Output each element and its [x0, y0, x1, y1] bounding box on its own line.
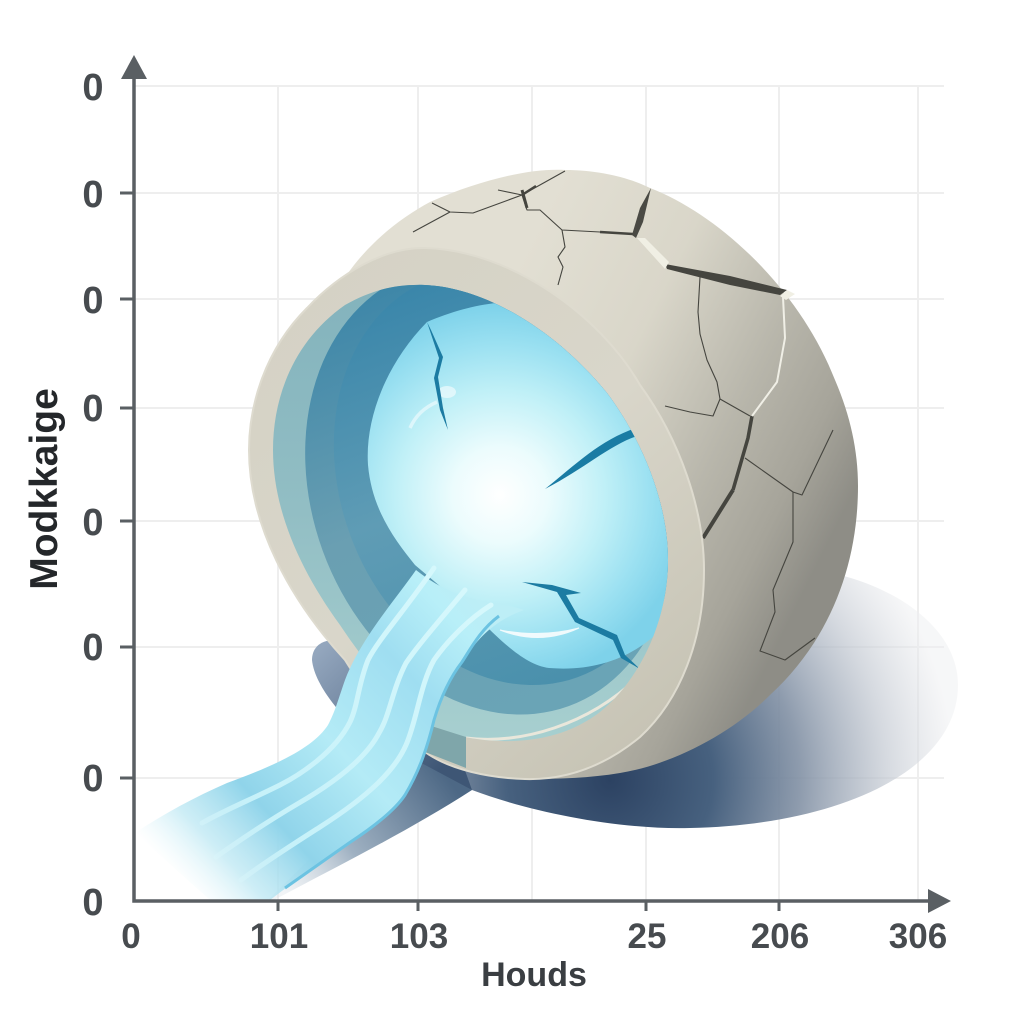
x axis labels: 206	[751, 917, 809, 956]
y axis labels: 0	[82, 388, 104, 430]
stream right edge	[285, 616, 499, 888]
thick cracks	[632, 188, 795, 300]
shadow under sphere	[268, 575, 958, 900]
y axis labels	[82, 67, 104, 924]
sphere shell	[340, 170, 858, 779]
arrow: x axis	[928, 889, 951, 913]
y axis labels: 0	[82, 882, 104, 924]
x axis labels: 101	[250, 917, 308, 956]
x axis labels: 0	[121, 917, 141, 956]
stream stripes	[202, 568, 491, 880]
glowing water sphere	[368, 303, 668, 669]
cracks in shell	[413, 171, 833, 660]
cavity ring inner	[334, 284, 668, 685]
y axis labels: 0	[82, 502, 104, 544]
blue crack right	[545, 428, 637, 489]
blue crack lower	[522, 582, 640, 669]
inner cavity	[273, 284, 668, 742]
axes	[120, 55, 951, 913]
x axis labels: 103	[390, 917, 448, 956]
y axis title: Modkkaige	[23, 388, 66, 590]
x axis labels: 306	[889, 917, 947, 956]
rim lower section tinted by water	[425, 724, 466, 768]
y axis labels: 0	[82, 758, 104, 800]
cavity ring outer	[305, 284, 668, 714]
x axis title: Houds	[481, 956, 587, 994]
water stream	[135, 568, 524, 900]
blue crack upper	[427, 322, 448, 430]
sphere highlights	[438, 386, 456, 398]
y axis labels: 0	[82, 627, 104, 669]
x axis labels: 25	[628, 917, 666, 956]
arrow: y axis	[121, 55, 147, 79]
y axis labels: 0	[82, 280, 104, 322]
inner lip highlight	[466, 687, 624, 740]
grid lines	[134, 86, 944, 900]
y axis labels: 0	[82, 67, 104, 109]
x axis labels	[121, 917, 947, 956]
rim of opening	[249, 248, 704, 779]
y axis labels: 0	[82, 174, 104, 216]
